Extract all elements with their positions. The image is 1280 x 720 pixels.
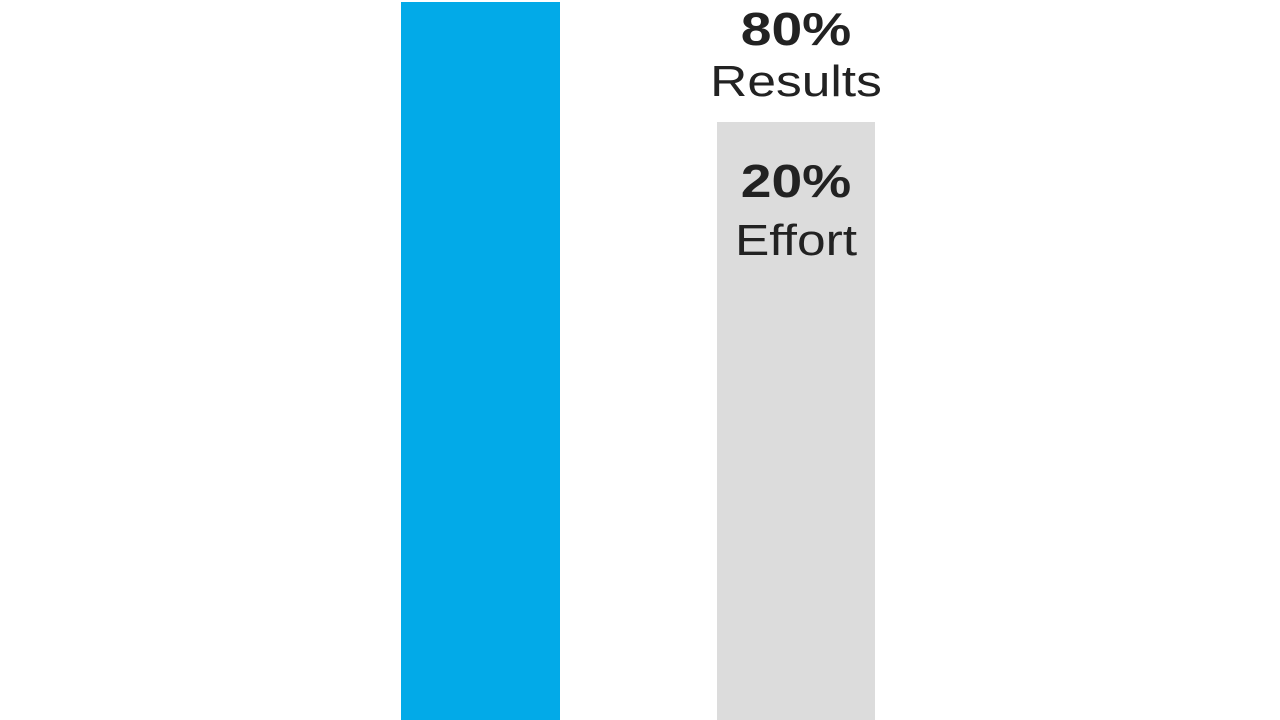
label: 20% effort: Effort [735,216,857,265]
label: 80% results [710,3,882,106]
bar: blue results bar [401,2,560,720]
label: 80% results: 80% [741,3,851,55]
bar: gray effort bar [717,122,875,720]
label: 80% results: Results [710,57,882,106]
label: 20% effort [735,155,857,265]
label: 20% effort: 20% [741,155,851,207]
